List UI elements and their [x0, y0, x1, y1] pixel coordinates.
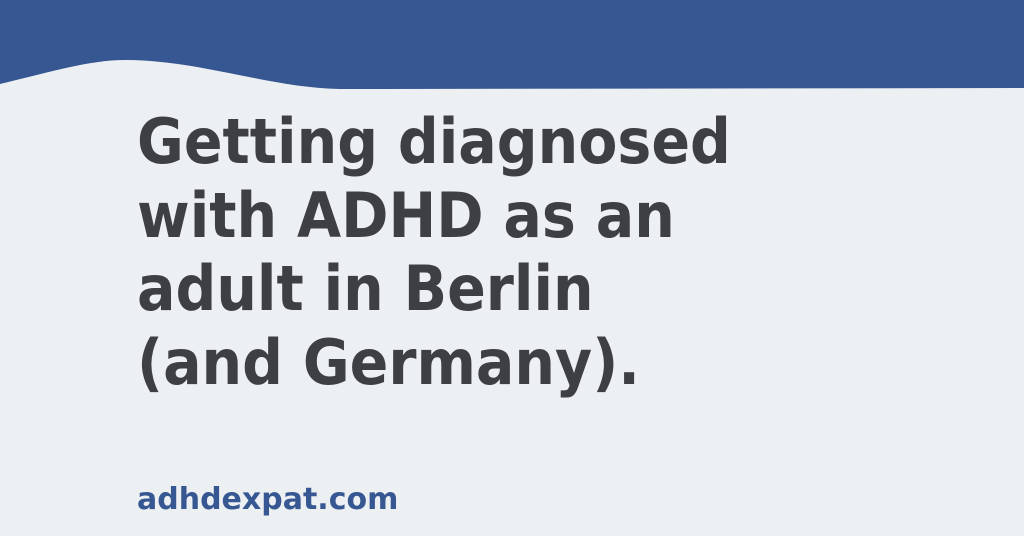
header wave: [0, 0, 1024, 89]
title: adult in Berlin: [137, 252, 594, 325]
title: Getting diagnosed: [137, 105, 731, 178]
website url: adhdexpat.com: [137, 482, 398, 517]
title: [137, 105, 731, 398]
title: (and Germany).: [137, 326, 640, 398]
title: with ADHD as an: [137, 178, 675, 252]
